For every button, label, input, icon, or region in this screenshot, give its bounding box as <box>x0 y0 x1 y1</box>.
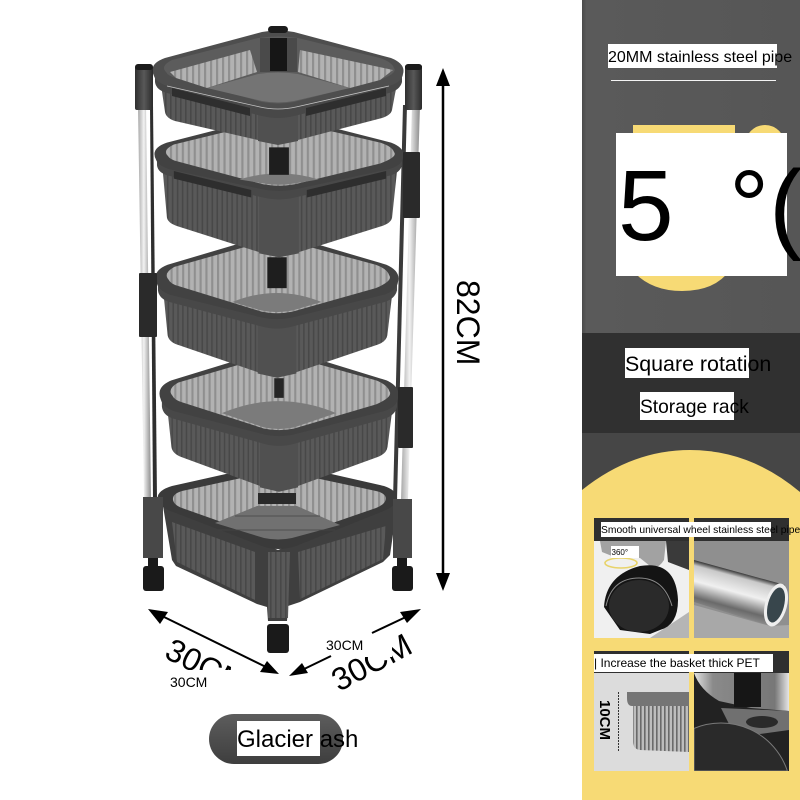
casters <box>143 558 413 653</box>
dimension: right 30CM: 30CM <box>326 637 363 653</box>
colour label: Glacier ash pill <box>209 714 358 764</box>
photo: steel pipe close-up <box>694 518 789 638</box>
sidebar top section <box>582 0 800 333</box>
photo: basket depth 10CM <box>594 651 689 771</box>
tier 4 basket <box>159 350 398 492</box>
sidebar lower section <box>582 433 800 800</box>
heading: Square rotation: Square rotation <box>625 352 771 376</box>
dimension: left 30CM: 30CM <box>170 674 207 690</box>
product: five tier rotating storage rack <box>135 26 422 653</box>
dimension: right 30CM: 30CM <box>325 626 418 698</box>
photo: caster wheel close-up <box>594 518 689 638</box>
heading: 20MM stainless steel pipe: 20MM stainless steel pipe <box>608 49 792 66</box>
label: 360 degrees: 360° <box>612 548 628 557</box>
pole sleeves <box>135 64 422 558</box>
left and right steel poles <box>138 105 420 500</box>
badge: degree rotation: 5 °( <box>618 150 800 262</box>
caption: Smooth universal wheel: Smooth universal wheel stainless steel pipe <box>601 525 800 536</box>
badge: degree rotation <box>616 125 800 291</box>
sidebar dark band <box>582 333 800 433</box>
dimension: 82CM height arrow: 82CM <box>450 280 486 365</box>
caption: Increase the basket thick PET: | Increase the basket thick PET <box>594 656 761 670</box>
label: 360 degrees <box>611 546 639 558</box>
dimension: left 30CM: 30CM <box>160 631 252 702</box>
photo: basket depth 10CM: 10CM <box>596 700 613 740</box>
tier 3 basket <box>155 235 398 378</box>
dimension: 82CM height arrow <box>436 68 486 591</box>
tier 1 top basket <box>152 26 404 145</box>
photo: wheel and frame close-up <box>694 651 789 771</box>
colour label: Glacier ash pill: Glacier ash <box>237 726 358 753</box>
dimension: right 30CM <box>289 609 421 698</box>
tier 5 body panels and legs <box>162 500 398 621</box>
dimension: left 30CM <box>148 609 279 702</box>
panel: white background <box>0 0 582 800</box>
yellow arch background <box>582 450 800 800</box>
panel: right sidebar <box>582 0 800 800</box>
heading: 20MM stainless steel pipe <box>608 44 792 81</box>
tier 5 bottom basket <box>158 464 398 621</box>
tier 2 basket <box>154 117 403 257</box>
tier 5 interior <box>173 472 386 539</box>
tier 5 floor <box>215 506 340 540</box>
heading: Storage rack: Storage rack <box>640 397 749 418</box>
tier 5 rim <box>158 464 397 549</box>
